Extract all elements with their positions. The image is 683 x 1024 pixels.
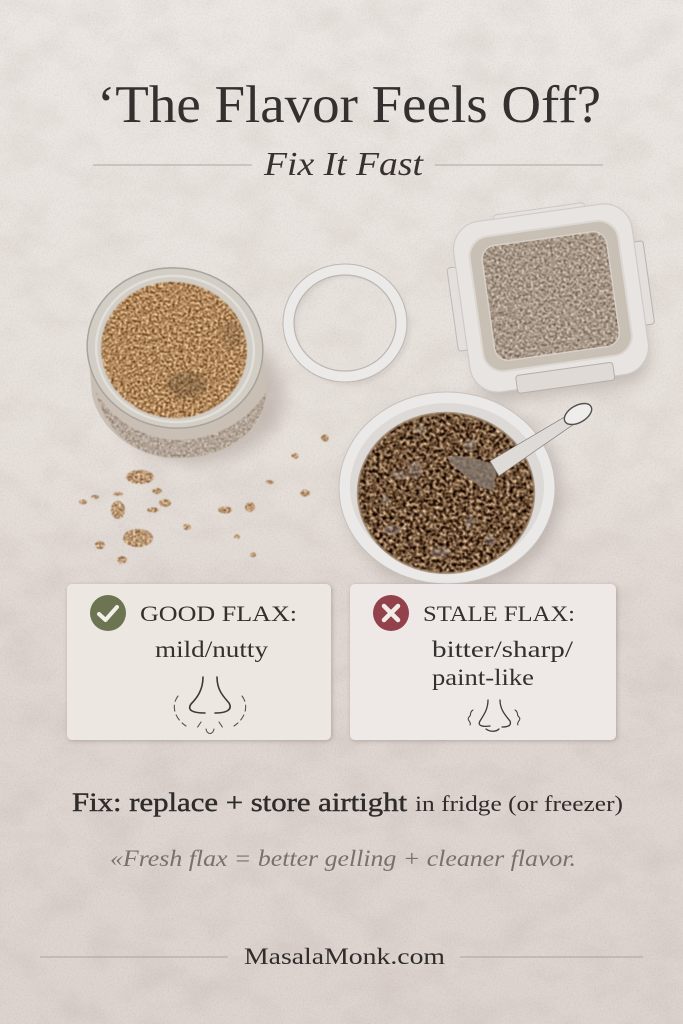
heading: stale flax: STALE FLAX: [423,601,575,626]
icon: nose with sharp aroma [468,700,520,731]
title: ‘The Flavor Feels Off? [97,76,601,134]
icon: cross mark [373,595,409,631]
text: fresh flax note: «Fresh flax = better gelling + cleaner flavor. [110,846,576,871]
gel highlights [380,426,496,557]
text: stale flax descriptor: bitter/sharp/ [432,637,574,662]
icon: nose with soft aroma [174,677,246,734]
footer: website with rules: MasalaMonk.com [244,944,445,969]
text: fix storage location: in fridge (or freezer) [415,791,623,816]
photo: clear jar lid ring [283,264,407,382]
text: stale flax descriptor: paint-like [432,665,534,690]
photo: bowl of flax gel with spoon [339,392,595,589]
text: good flax descriptor: mild/nutty [155,637,269,662]
text: stale flax descriptor [432,637,574,690]
photo: glass jar of ground flax [77,257,285,463]
panel: good flax [67,584,331,740]
spoon [447,399,595,490]
panel: stale flax [350,584,616,740]
heading: good flax: GOOD FLAX: [140,601,297,626]
subtitle with rules: Fix It Fast [263,146,425,183]
photo: square airtight container [440,195,662,407]
text: fix instruction: Fix: replace + store airtight [72,788,408,817]
icon: check mark [90,595,126,631]
photo: scattered flax crumbs [79,434,329,564]
